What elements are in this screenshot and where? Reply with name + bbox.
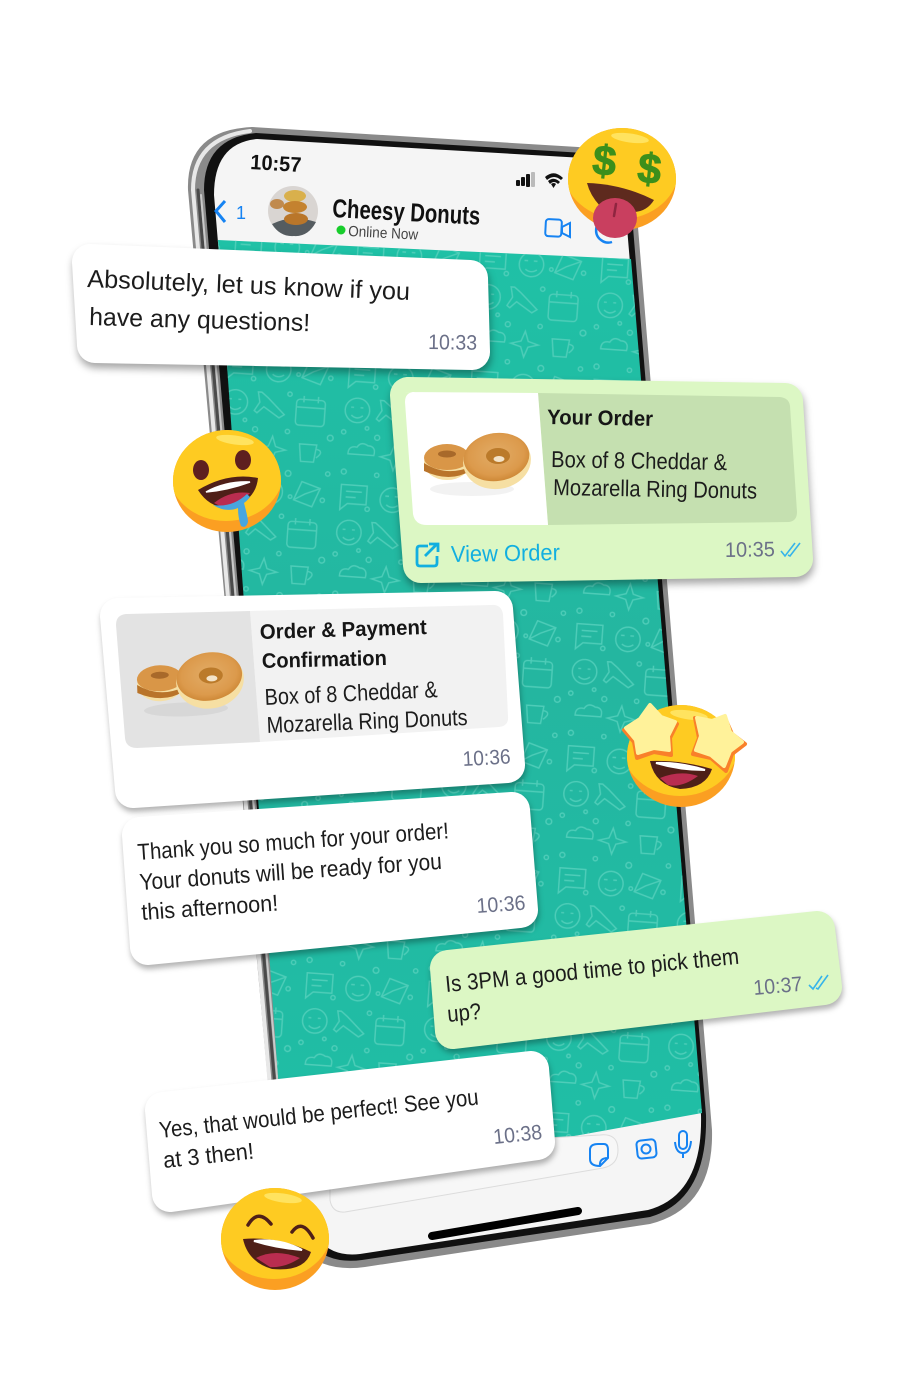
icon: donuts <box>136 647 249 718</box>
emoji: money eyes <box>563 117 679 238</box>
message text <box>158 1084 480 1173</box>
bubble: pick up time <box>444 929 828 1031</box>
status icons <box>516 172 563 188</box>
input field <box>330 1135 618 1212</box>
read ticks <box>781 543 800 556</box>
message text <box>87 265 411 337</box>
view order link: View Order <box>451 539 560 567</box>
back button <box>216 201 225 222</box>
phone <box>188 127 712 1268</box>
frame highlights <box>193 131 286 1180</box>
message text: Yes, that would be perfect! See you <box>158 1084 480 1143</box>
timestamp: 10:35 <box>725 538 775 562</box>
emoji: drooling <box>168 419 284 532</box>
phone frame <box>188 127 712 1268</box>
bubble: thank you <box>137 810 526 947</box>
emoji: money eyes: $ <box>590 136 619 185</box>
video icon <box>545 219 570 237</box>
timestamp: 10:36 <box>476 892 526 918</box>
message text: at 3 then! <box>162 1138 255 1173</box>
bubble: order confirmation <box>116 605 511 790</box>
confirmation title <box>259 616 427 673</box>
bubble: your order <box>405 392 800 567</box>
bubble: let us know <box>87 262 477 355</box>
phone call icon <box>596 225 612 243</box>
emoji: laughing <box>216 1177 332 1290</box>
donut image panel <box>405 392 548 525</box>
confirmation title: Confirmation <box>262 647 387 673</box>
timestamp: 10:33 <box>428 331 477 355</box>
avatar <box>268 186 318 236</box>
view order icon <box>417 544 438 566</box>
camera icon <box>636 1139 657 1159</box>
order details panel <box>538 393 797 525</box>
message text: Thank you so much for your order! <box>137 817 450 865</box>
order description: Mozarella Ring Donuts <box>553 474 757 504</box>
order title: Your Order <box>547 406 653 431</box>
screen bezel <box>204 133 706 1261</box>
home indicator <box>432 1211 578 1236</box>
confirmation description: Mozarella Ring Donuts <box>266 704 468 738</box>
message text <box>137 817 450 925</box>
confirmation title: Order & Payment <box>259 616 427 644</box>
confirmation description: Box of 8 Cheddar & <box>264 676 438 710</box>
chat name: Cheesy Donuts <box>332 193 481 231</box>
mic icon <box>675 1131 691 1158</box>
online status: Online Now <box>348 223 419 244</box>
screen background <box>214 139 701 1255</box>
read ticks <box>809 975 828 989</box>
timestamp: 10:36 <box>462 746 511 771</box>
confirmation details panel <box>250 605 508 742</box>
order description <box>551 446 757 504</box>
icon: donuts <box>424 429 535 496</box>
message text: up? <box>446 998 482 1027</box>
donut image panel <box>116 611 260 748</box>
unread count: 1 <box>236 203 246 223</box>
timestamp: 10:38 <box>492 1121 543 1149</box>
emoji: star eyes <box>622 694 745 807</box>
emoji: money eyes: $ <box>635 144 664 193</box>
bubble: see you at 3 <box>158 1069 543 1194</box>
message text: Absolutely, let us know if you <box>87 265 411 306</box>
status bar time: 10:57 <box>250 151 302 177</box>
message text: Your donuts will be ready for you <box>139 848 443 895</box>
message text: Is 3PM a good time to pick them <box>444 943 740 997</box>
message text: this afternoon! <box>141 889 279 925</box>
message text <box>444 943 740 1027</box>
confirmation description <box>264 676 468 738</box>
chat wallpaper <box>218 240 702 1188</box>
timestamp: 10:37 <box>752 973 803 1000</box>
sticker icon <box>590 1144 608 1166</box>
message text: have any questions! <box>89 303 311 337</box>
order description: Box of 8 Cheddar & <box>551 446 727 475</box>
